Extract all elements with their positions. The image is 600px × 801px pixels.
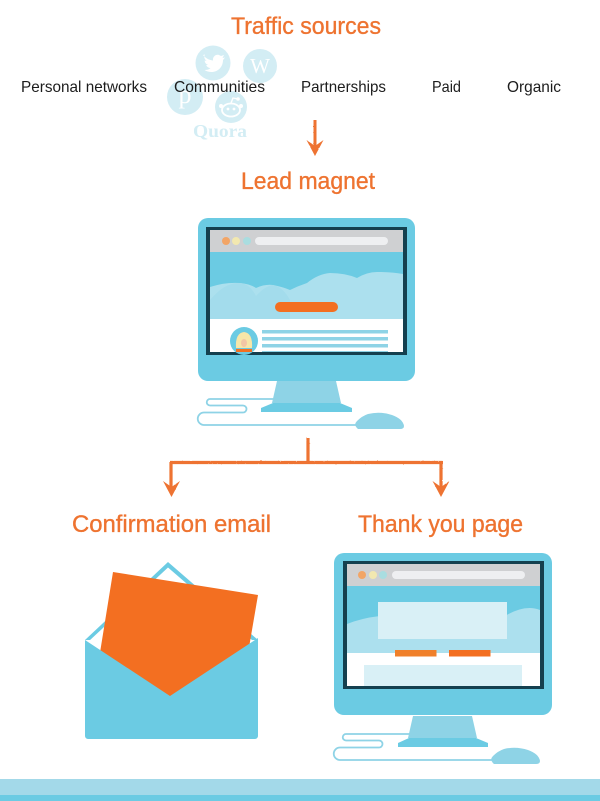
cta button xyxy=(275,302,338,312)
cable xyxy=(198,399,358,425)
icon: open envelope with orange letter xyxy=(85,562,258,739)
screen frame xyxy=(206,227,407,355)
icon: twitter xyxy=(196,46,230,80)
label: organic: Organic xyxy=(507,79,561,96)
avatar xyxy=(230,327,258,355)
text lines xyxy=(262,330,388,352)
screen frame xyxy=(343,561,544,689)
letter xyxy=(98,572,258,712)
headline panel xyxy=(378,602,507,639)
traffic source labels xyxy=(21,79,561,96)
mouse xyxy=(355,413,404,429)
envelope flap xyxy=(85,562,258,696)
label: partnerships: Partnerships xyxy=(301,79,386,96)
title: traffic sources: Traffic sources xyxy=(231,13,381,40)
label: paid: Paid xyxy=(432,79,461,96)
screen page xyxy=(347,564,540,686)
stand xyxy=(272,381,341,403)
screen page xyxy=(210,230,403,355)
orange buttons xyxy=(395,650,490,656)
title: lead magnet: Lead magnet xyxy=(241,168,375,195)
stand xyxy=(408,716,477,738)
arrow: traffic sources to lead magnet xyxy=(306,120,324,156)
arrow: lead magnet branching to confirmation email and thank you page xyxy=(163,438,450,497)
mouse xyxy=(491,748,540,764)
icon: quora: Quora xyxy=(193,121,247,141)
monitor body xyxy=(198,218,415,381)
cable xyxy=(334,734,494,760)
icon: pinterest: p xyxy=(178,80,192,109)
stand base xyxy=(261,403,352,412)
label: communities: Communities xyxy=(174,79,265,96)
content panel xyxy=(364,665,522,686)
icon: wordpress: W xyxy=(250,54,270,78)
label: personal networks: Personal networks xyxy=(21,79,147,96)
icon: desktop computer with thank you page xyxy=(334,553,552,764)
monitor body xyxy=(334,553,552,715)
stand base xyxy=(398,738,488,747)
community social icons xyxy=(167,46,277,141)
title: thank you page: Thank you page xyxy=(358,511,523,538)
envelope body xyxy=(85,638,258,739)
title: confirmation email: Confirmation email xyxy=(72,511,271,538)
footer bands xyxy=(0,779,600,801)
icon: reddit xyxy=(215,91,247,123)
icon: desktop computer with lead magnet page xyxy=(198,218,415,429)
